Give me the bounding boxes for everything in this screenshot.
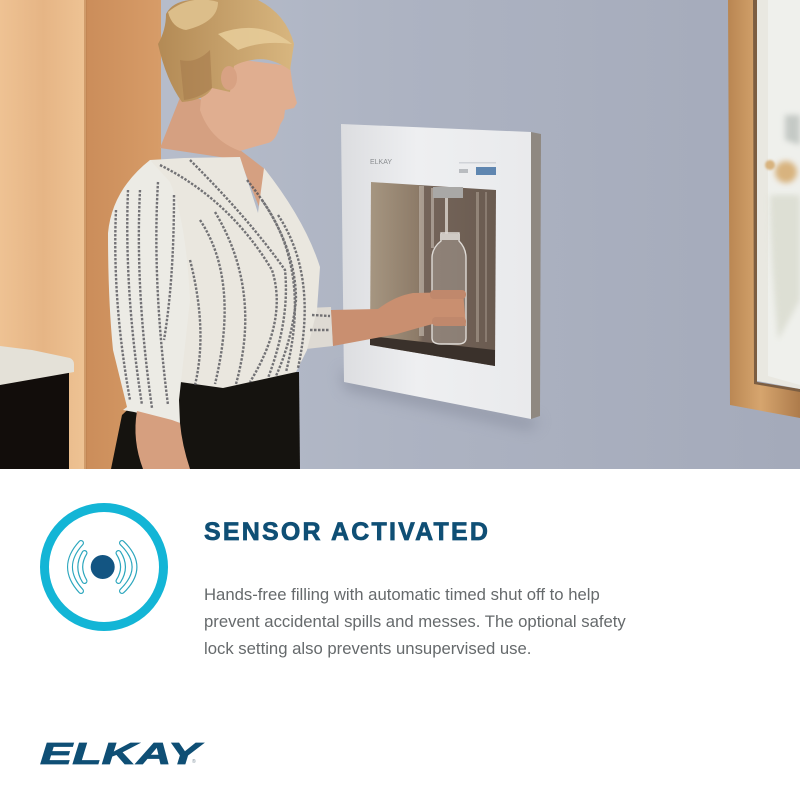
body text: Hands-free filling with automatic timed shut off to help [204,585,600,604]
picture frame [728,0,800,418]
fingers [430,290,466,326]
counter [0,346,74,469]
blouse body [135,157,320,388]
left waves [70,543,84,591]
dispenser [341,124,541,419]
front panel [341,124,531,419]
body text [204,585,626,658]
spout [433,187,463,198]
ear [221,66,237,90]
wall [0,0,800,469]
logo: Elkay: ® [192,758,196,765]
niche [370,182,496,366]
side edge [531,132,541,419]
icon: sensor waves in a circle [40,503,168,631]
hair [158,0,294,102]
dispenser shadow [340,370,540,430]
logo: Elkay: ELKAY [40,736,205,771]
ring [44,508,164,626]
logo: Elkay [40,736,205,771]
sleeve [108,160,190,423]
bottle [432,233,466,344]
logo on panel: ELKAY [370,159,392,166]
body text: prevent accidental spills and messes. The optional safety [204,612,626,631]
forearm and hand [331,292,466,346]
heading: SENSOR ACTIVATED [204,518,490,546]
centre dot [91,555,115,579]
upper arm below sleeve [135,411,190,469]
photo: woman filling bottle at wall-mounted dispenser [0,0,800,469]
reflections [419,186,424,336]
face [200,55,297,151]
forearm cuff [306,307,333,349]
mat and painting [757,0,800,389]
skirt [111,372,300,469]
display [476,167,496,175]
woman [108,0,466,469]
blouse stripes [115,160,330,408]
right waves [118,543,134,591]
neck [160,95,266,214]
wood column [0,0,161,469]
body text: lock setting also prevents unsupervised use. [204,639,531,658]
